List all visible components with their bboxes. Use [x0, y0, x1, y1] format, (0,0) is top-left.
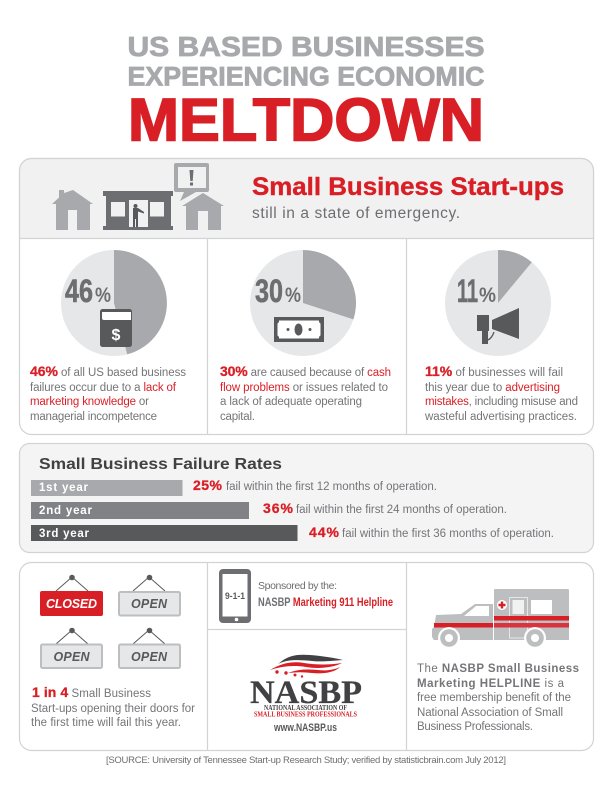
bar: 3rd year: fail within the first 36 months of operation.: [342, 528, 554, 540]
text: sponsor: [258, 580, 393, 609]
logo flag: [270, 655, 343, 678]
text: 46 percent: [30, 363, 186, 423]
panel: 30 percent: [220, 250, 391, 423]
icon: ambulance: [432, 589, 569, 649]
bar: 2nd year: [31, 500, 507, 519]
sign: closed: CLOSED: [46, 597, 97, 611]
heading: small business start-ups: Small Business Start-ups: [252, 173, 564, 201]
text: helpline description: Marketing HELPLINE is a: [417, 678, 565, 690]
text: 11 percent: mistakes, including misuse and: [425, 396, 578, 408]
bar: 1st year: [31, 477, 437, 496]
pie chart: 11%: 11: [457, 273, 478, 309]
pie chart: 30%: %: [285, 284, 301, 307]
text: 30 percent: capital.: [220, 411, 255, 423]
sign: open: [119, 628, 180, 668]
pie chart: 46%: %: [95, 284, 111, 307]
text: 11 percent: [424, 363, 578, 423]
panel: bottom row: [20, 562, 594, 750]
title: EXPERIENCING ECONOMIC: [128, 62, 485, 92]
heading: failure rates: Small Business Failure Rates: [39, 456, 282, 473]
text: 46 percent: failures occur due to a lack of: [30, 382, 177, 394]
text: 11 percent: 11% of businesses will fail: [425, 363, 563, 379]
text: 30 percent: 30% are caused because of cash: [220, 363, 391, 379]
panel: helpline: [417, 589, 579, 733]
text: 46 percent: 46% of all US based business: [30, 363, 186, 379]
pie chart: 30%: [250, 250, 356, 356]
panel: failure rates: [20, 444, 594, 552]
icon: phone: [219, 569, 251, 623]
title: MELTDOWN: [128, 86, 484, 154]
pie chart: 46%: 46: [65, 273, 93, 309]
panel: start-up causes: [20, 158, 594, 434]
icon: right house: [182, 193, 224, 230]
bar: 1st year: fail within the first 12 months of operation.: [226, 481, 437, 493]
text: helpline description: National Association of Small: [417, 707, 563, 719]
bar: 1st year: 25%: [193, 477, 223, 493]
pie chart: 11%: [445, 250, 551, 356]
text: 46 percent: managerial incompetence: [30, 411, 157, 423]
logo: NASBP: [250, 655, 362, 734]
icon: dollar book: [100, 309, 132, 347]
icon: dollar book: $: [112, 327, 121, 344]
text: 30 percent: flow problems or issues related to: [220, 382, 388, 394]
pie chart: 46%: [61, 250, 167, 356]
sign: open: [119, 575, 180, 616]
panel: door signs: [31, 575, 195, 729]
text: helpline description: The NASBP Small Business: [417, 663, 579, 675]
source note: [SOURCE: University of Tennessee Start-up Research Study; verified by statisticbrain.com July 2012]: [106, 755, 506, 766]
icon: alert speech bubble: [174, 163, 209, 201]
heading: small business start-ups: still in a state of emergency.: [252, 205, 460, 222]
text: sponsor: Sponsored by the:: [258, 580, 337, 592]
logo: NASBP: www.NASBP.us: [273, 722, 337, 734]
text: 30 percent: [220, 363, 391, 423]
text: 11 percent: this year due to advertising: [425, 382, 560, 394]
icon: left house: [52, 190, 93, 230]
text: 1 in 4: the first time will fail this year.: [31, 717, 181, 729]
sign: closed: [40, 575, 103, 616]
text: 11 percent: wasteful advertising practices.: [424, 411, 577, 423]
logo: NASBP: NASBP: [250, 675, 362, 711]
text: helpline description: free membership benefit of the: [417, 692, 571, 704]
title: [128, 31, 485, 154]
icon: phone: 9-1-1: [225, 591, 245, 601]
text: 1 in 4: 1 in 4 Small Business: [32, 684, 151, 700]
icon: store front: [103, 191, 173, 230]
text: helpline description: Business Professionals.: [417, 721, 533, 733]
sign: open: OPEN: [131, 597, 168, 611]
heading: small business start-ups: [252, 173, 564, 222]
sign: open: [41, 628, 102, 668]
pie chart: 11%: %: [479, 284, 496, 307]
text: helpline description: [417, 663, 579, 733]
bar: 2nd year: fail within the first 24 months of operation.: [296, 504, 507, 516]
bar: 1st year: 1st year: [39, 482, 89, 494]
bar: 2nd year: 2nd year: [39, 505, 93, 517]
text: 46 percent: marketing knowledge or: [30, 396, 149, 408]
text: 30 percent: a lack of adequate operating: [220, 396, 362, 408]
bar: 2nd year: 36%: [263, 500, 294, 516]
pie chart: 30%: 30: [255, 273, 283, 309]
text: sponsor: NASBP Marketing 911 Helpline: [258, 595, 393, 609]
sign: open: OPEN: [54, 650, 90, 664]
logo: NASBP: NATIONAL ASSOCIATION OF: [264, 704, 347, 712]
panel: 46 percent: [30, 250, 186, 423]
icon: megaphone: [477, 308, 519, 344]
text: 1 in 4: [31, 684, 195, 729]
title: US BASED BUSINESSES: [128, 31, 484, 62]
bar: 3rd year: 44%: [309, 524, 340, 540]
bar: 3rd year: 3rd year: [39, 528, 90, 540]
logo: NASBP: SMALL BUSINESS PROFESSIONALS: [254, 710, 357, 718]
panel: 11 percent: [424, 250, 578, 423]
text: 1 in 4: Start-ups opening their doors for: [31, 703, 195, 715]
bar: 3rd year: [31, 524, 554, 541]
icon: banknote: [274, 317, 324, 342]
sign: open: OPEN: [131, 650, 168, 664]
